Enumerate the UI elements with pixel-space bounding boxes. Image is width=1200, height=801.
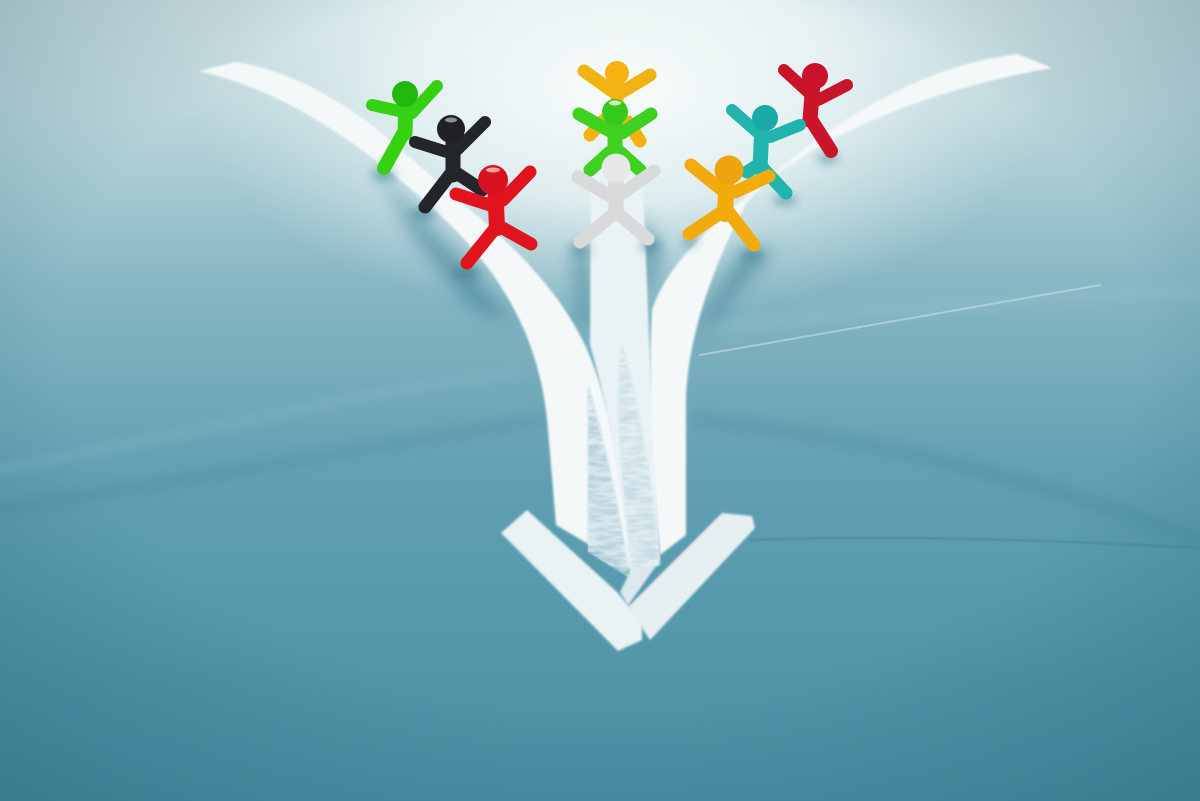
shadows along the path edges bbox=[378, 170, 775, 350]
figure: orange bbox=[689, 156, 769, 245]
figure: teal bbox=[732, 105, 800, 193]
figure: red right bbox=[784, 63, 847, 151]
figure: white bbox=[578, 154, 654, 242]
chalk texture where the paths overlap bbox=[588, 345, 660, 578]
figure: black bbox=[415, 115, 485, 207]
arrowhead: right stroke bbox=[628, 513, 755, 640]
arrowhead: left stroke bbox=[501, 510, 642, 651]
figure: yellow back bbox=[584, 61, 650, 141]
chalk path: centre branch bbox=[590, 140, 660, 575]
figure: green left bbox=[372, 81, 437, 168]
chalk path: left branch bbox=[199, 62, 632, 570]
chalk smudges on the board bbox=[0, 285, 1200, 548]
contact shadows below the figures bbox=[372, 153, 839, 279]
figure: red front left bbox=[456, 165, 531, 263]
chalk path: right branch bbox=[650, 54, 1052, 555]
figure: green centre bbox=[579, 99, 651, 170]
arrowhead: centre notch bbox=[620, 566, 656, 606]
chalk arrowhead bbox=[501, 510, 755, 651]
